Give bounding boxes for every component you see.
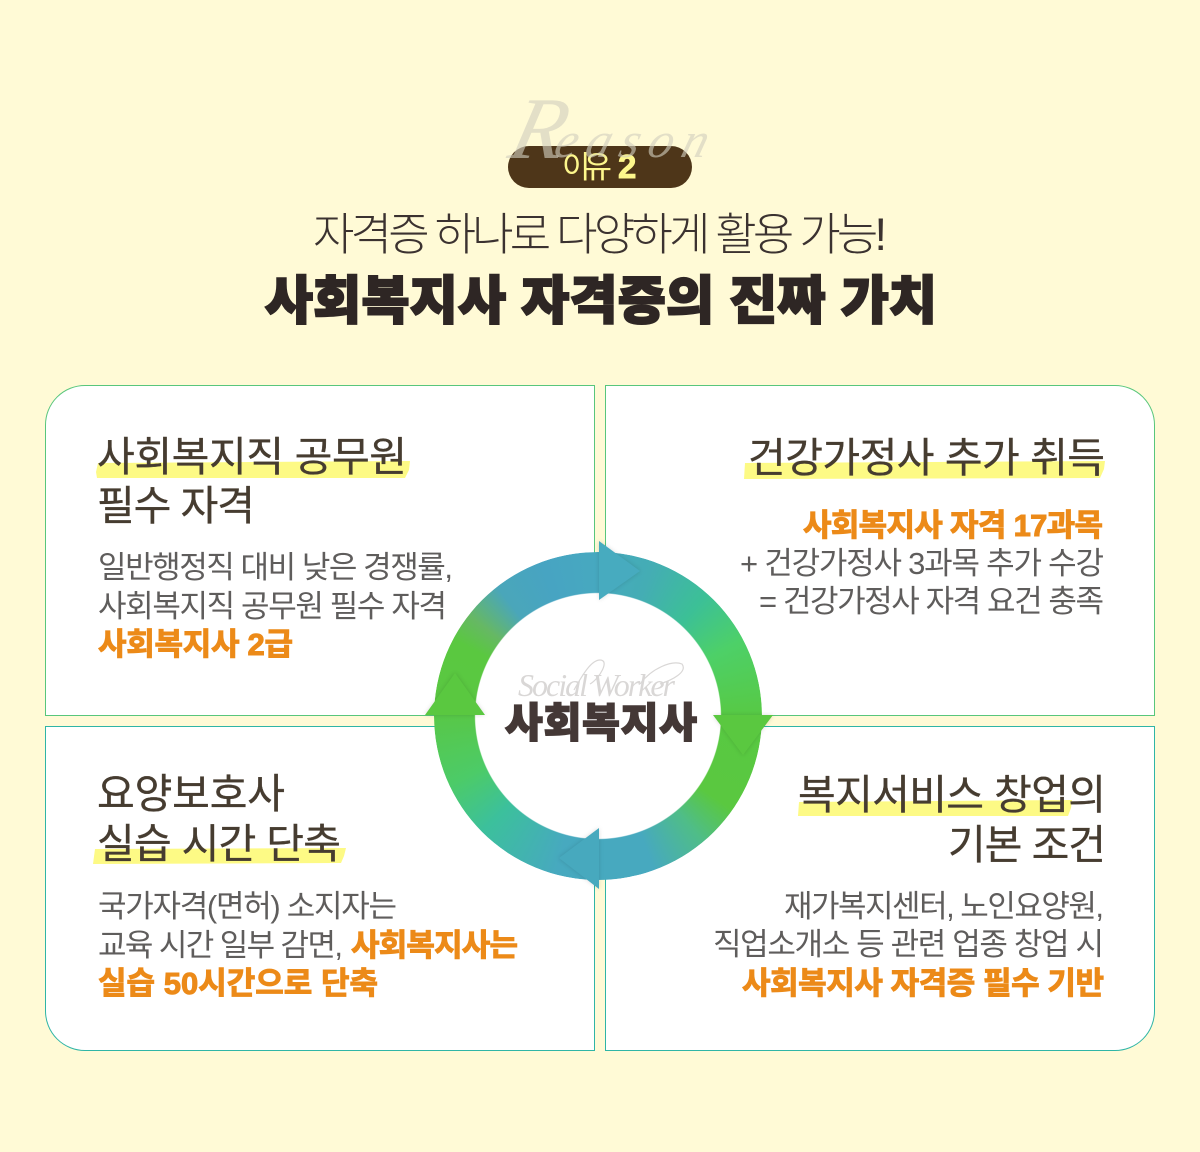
heading: 요양보호사 <box>97 771 285 817</box>
body text: 사회복지사 자격증 필수 기반 <box>742 966 1104 1001</box>
body text: + 건강가정사 3과목 추가 수강 <box>740 546 1104 581</box>
badge label: 이유 <box>562 150 612 185</box>
heading: 복지서비스 창업의 <box>798 772 1106 818</box>
body text: 사회복지사는 <box>351 928 518 963</box>
body text: 실습 50시간으로 단축 <box>98 966 378 1001</box>
body text: 사회복지직 공무원 필수 자격 <box>98 589 447 624</box>
heading: 사회복지직 공무원 <box>97 434 407 480</box>
highlight stroke <box>798 800 1072 816</box>
body text <box>98 550 453 662</box>
body text: 재가복지센터, 노인요양원, <box>784 889 1104 924</box>
heading: 필수 자격 <box>97 483 255 529</box>
heading: 건강가정사 추가 취득 <box>748 435 1105 481</box>
arrow: bottom <box>559 828 599 889</box>
panel: healthy family specialist <box>605 385 1155 716</box>
title: 사회복지사 자격증의 진짜 가치 <box>265 273 937 331</box>
body text: 국가자격(면허) 소지자는 <box>98 889 397 924</box>
heading: 기본 조건 <box>948 822 1106 868</box>
highlight stroke <box>93 848 346 864</box>
badge label: 2 <box>618 148 636 185</box>
body text <box>740 508 1104 619</box>
heading <box>97 434 407 529</box>
body text: 교육 시간 일부 감면, <box>98 928 343 963</box>
badge pill <box>508 146 692 188</box>
body text: 일반행정직 대비 낮은 경쟁률, <box>98 550 453 585</box>
script word: Reason: R <box>500 80 579 178</box>
body text: 사회복지사 자격 17과목 <box>803 508 1103 543</box>
panel: public officer qualification <box>45 385 595 716</box>
body text: 사회복지사 2급 <box>98 627 293 662</box>
badge label <box>562 148 636 185</box>
body text: 직업소개소 등 관련 업종 창업 시 <box>713 927 1104 962</box>
arrow: right <box>713 715 773 755</box>
arrow: top <box>599 541 640 600</box>
centre label: 사회복지사 <box>505 700 697 746</box>
script word: Reason: eason <box>549 114 716 169</box>
ring <box>434 552 762 880</box>
highlight stroke <box>744 461 1105 479</box>
body text: = 건강가정사 자격 요건 충족 <box>759 584 1104 619</box>
heading <box>798 772 1106 868</box>
arrow: left <box>425 673 485 715</box>
body text <box>713 889 1104 1001</box>
script word: Social Worker: Social Worker <box>518 667 676 703</box>
body text <box>98 889 518 1001</box>
center circle <box>471 589 725 843</box>
panel: welfare business <box>605 726 1155 1051</box>
panel: care worker <box>45 726 595 1051</box>
heading: 실습 시간 단축 <box>97 821 341 867</box>
script word: Reason <box>500 80 716 178</box>
heading <box>97 771 341 867</box>
highlight stroke <box>96 461 410 478</box>
subtitle: 자격증 하나로 다양하게 활용 가능! <box>313 209 887 260</box>
